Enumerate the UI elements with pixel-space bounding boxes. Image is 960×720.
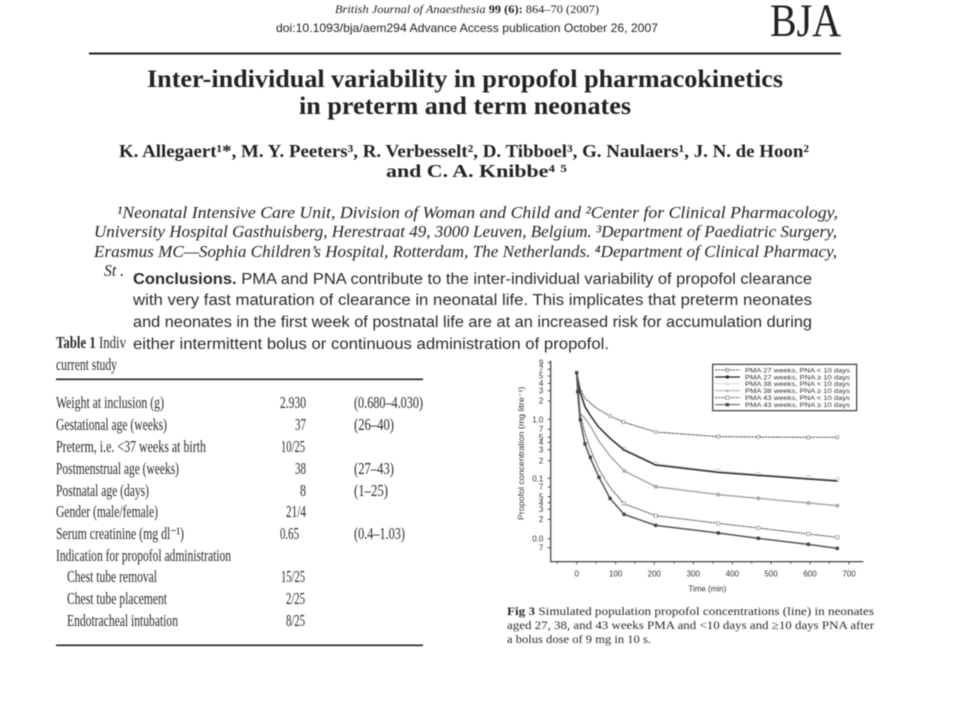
series: PMA 27 weeks, PNA under 10 days	[577, 373, 839, 439]
conclusions text block: and neonates in the first week of postnatal life are at an increased risk for accumulation during	[133, 314, 812, 331]
y axis tick labels: 0.1	[532, 474, 544, 483]
x axis tick labels: 0	[574, 570, 579, 579]
authors: and C. A. Knibbe⁴ ⁵	[386, 161, 567, 181]
y axis tick labels: 5	[539, 492, 544, 501]
chart legend: PMA 27 weeks, PNA < 10 days	[745, 367, 851, 374]
affiliations: Erasmus MC—Sophia Children’s Hospital, Rotterdam, The Netherlands. ⁴Department of Clinical Pharmacy,	[93, 242, 837, 261]
x axis tick labels: 600	[803, 570, 817, 579]
table row labels: Chest tube placement	[67, 589, 167, 608]
authors: K. Allegaert¹*, M. Y. Peeters³, R. Verbesselt², D. Tibboel³, G. Naulaers¹, J. N. de Hoon²	[119, 141, 809, 161]
x axis tick labels: 100	[609, 570, 623, 579]
figure 3 caption	[507, 604, 874, 646]
x axis tick labels: 200	[648, 570, 662, 579]
journal header	[276, 2, 658, 35]
table row labels: Chest tube removal	[67, 567, 157, 586]
table values: 8/25	[286, 611, 305, 630]
conclusions text block: with very fast maturation of clearance in neonatal life. This implicates that preterm neonates	[132, 292, 812, 309]
y axis tick labels: 0.0	[532, 535, 544, 544]
table values: 10/25	[281, 437, 305, 456]
y axis tick labels	[532, 358, 544, 552]
journal header: doi:10.1093/bja/aem294 Advance Access publication October 26, 2007	[276, 21, 658, 35]
table values: 38	[295, 459, 306, 478]
y axis tick labels: 4	[539, 498, 544, 507]
figure 3 caption: aged 27, 38, and 43 weeks PMA and <10 days and ≥10 days PNA after	[507, 618, 874, 632]
table values: 15/25	[281, 567, 305, 586]
series: PMA 27 weeks, PNA at least 10 days	[577, 373, 837, 481]
chart axes	[548, 361, 863, 564]
table row labels: Weight at inclusion (g)	[56, 393, 164, 412]
y axis tick labels: 5	[539, 372, 544, 381]
y axis tick labels: 2	[539, 456, 544, 465]
x axis tick labels: 500	[764, 570, 778, 579]
y axis tick labels: 5	[539, 433, 544, 442]
y axis tick labels: 1.0	[532, 415, 544, 424]
table ranges: (0.680–4.030)	[354, 393, 423, 412]
table caption: current study	[56, 355, 117, 374]
table row labels: Gestational age (weeks)	[56, 415, 167, 434]
table values: 21/4	[286, 502, 306, 521]
x axis tick labels: 700	[842, 570, 856, 579]
chart legend: PMA 38 weeks, PNA < 10 days	[745, 381, 851, 388]
affiliations: ¹Neonatal Intensive Care Unit, Division of Woman and Child and ²Center for Clinical Pharmacology,	[117, 203, 838, 222]
conclusions text block: Conclusions. PMA and PNA contribute to the inter-individual variability of propofol clearance	[133, 271, 812, 288]
chart legend: PMA 38 weeks, PNA ≥ 10 days	[745, 388, 851, 395]
authors	[119, 141, 809, 181]
table row labels: Preterm, i.e. <37 weeks at birth	[56, 437, 206, 456]
affiliations	[93, 203, 838, 280]
y axis tick labels: 2	[539, 515, 544, 524]
title: in preterm and term neonates	[299, 91, 631, 120]
conclusions text block: either intermittent bolus or continuous administration of propofol.	[133, 336, 609, 353]
conclusions text block	[132, 271, 812, 353]
y axis tick labels: 7	[539, 483, 544, 492]
line chart: propofol concentration over time	[517, 358, 863, 593]
table 1	[56, 333, 423, 646]
table caption: Table 1 Indiv	[56, 333, 126, 352]
x axis title: Time (min)	[688, 584, 727, 593]
chart legend: PMA 43 weeks, PNA ≥ 10 days	[745, 402, 851, 409]
y axis tick labels: 9	[539, 358, 544, 367]
series: PMA 43 weeks, PNA under 10 days	[577, 373, 839, 539]
table values: 2.930	[280, 393, 306, 412]
table values: 0.65	[280, 524, 299, 543]
table row labels: Indication for propofol administration	[56, 546, 231, 565]
table row labels: Endotracheal intubation	[67, 611, 178, 630]
affiliations: University Hospital Gasthuisberg, Herestraat 49, 3000 Leuven, Belgium. ³Department of Paediatric Surgery,	[94, 222, 837, 241]
y axis title: Propofol concentration (mg litre⁻¹)	[517, 386, 526, 520]
y axis tick labels: 2	[539, 397, 544, 406]
y axis tick labels: 4	[539, 438, 544, 447]
table ranges: (27–43)	[354, 459, 394, 478]
chart legend: PMA 43 weeks, PNA < 10 days	[745, 395, 851, 402]
y axis tick labels: 3	[539, 445, 544, 454]
table ranges	[354, 393, 423, 543]
table values: 8	[300, 481, 306, 500]
table row labels: Gender (male/female)	[56, 502, 158, 521]
table row labels: Postmenstrual age (weeks)	[56, 459, 179, 478]
y axis tick labels: 7	[539, 365, 544, 374]
table values: 37	[295, 415, 306, 434]
x axis tick labels: 400	[726, 570, 740, 579]
table values: 2/25	[286, 589, 305, 608]
y axis tick labels: 7	[539, 543, 544, 552]
table row labels: Serum creatinine (mg dl⁻¹)	[56, 524, 184, 543]
chart legend	[713, 364, 857, 411]
series: PMA 38 weeks, PNA at least 10 days	[577, 373, 839, 508]
table ranges: (1–25)	[354, 481, 388, 500]
y axis tick labels: 3	[539, 505, 544, 514]
table row labels: Postnatal age (days)	[56, 481, 149, 500]
y axis tick labels: 4	[539, 379, 544, 388]
title: Inter-individual variability in propofol pharmacokinetics	[147, 64, 783, 93]
figure 3 caption: a bolus dose of 9 mg in 10 s.	[507, 632, 651, 646]
x axis tick labels	[574, 570, 856, 579]
series: PMA 38 weeks, PNA under 10 days	[577, 373, 839, 482]
affiliations: St .	[104, 261, 124, 280]
series: PMA 43 weeks, PNA at least 10 days	[575, 371, 839, 550]
table caption	[56, 333, 126, 374]
figure 3 caption: Fig 3 Simulated population propofol concentrations (line) in neonates	[507, 604, 874, 618]
x axis tick labels: 300	[687, 570, 701, 579]
y axis tick labels: 3	[539, 386, 544, 395]
title	[147, 64, 783, 120]
journal header: British Journal of Anaesthesia 99 (6): 864–70 (2007)	[335, 2, 599, 16]
table ranges: (26–40)	[354, 415, 394, 434]
chart legend: PMA 27 weeks, PNA ≥ 10 days	[745, 374, 851, 381]
table row labels	[56, 393, 231, 630]
y axis tick labels: 7	[539, 425, 544, 434]
table values	[280, 393, 306, 630]
table ranges: (0.4–1.03)	[354, 524, 405, 543]
